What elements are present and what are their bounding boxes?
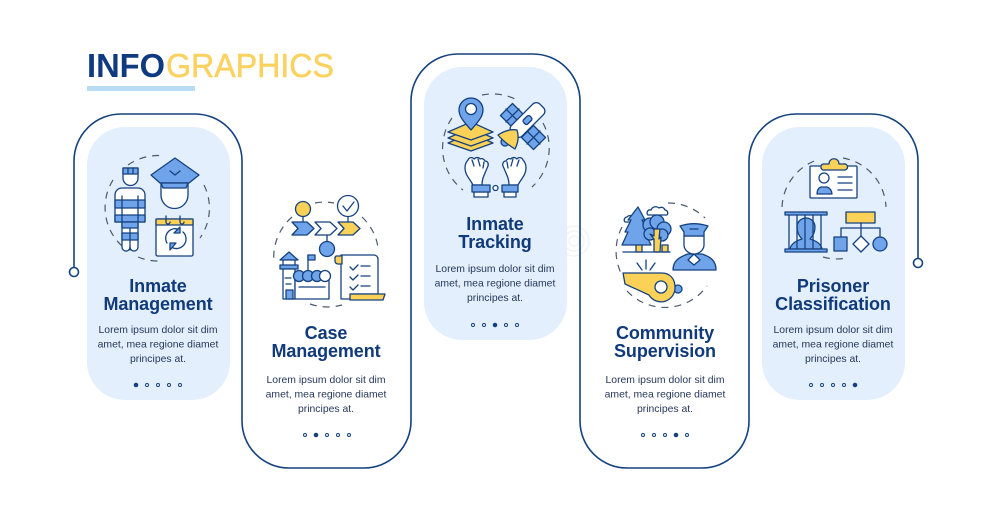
page dots	[134, 383, 182, 387]
heading: Inmate	[129, 276, 187, 296]
heading: Management	[271, 341, 381, 361]
icon: workflow, prison and checklist	[274, 196, 385, 307]
heading: Management	[103, 294, 213, 314]
heading: Supervision	[614, 341, 716, 361]
text block: amet, mea regione diamet	[266, 390, 386, 400]
heading: Case	[305, 323, 347, 343]
text block: principes at.	[298, 404, 354, 415]
text block: amet, mea regione diamet	[773, 340, 893, 350]
text block: Lorem ipsum dolor sit dim	[436, 264, 554, 275]
text block: Lorem ipsum dolor sit dim	[774, 325, 892, 336]
text block: principes at.	[637, 404, 693, 415]
text block: amet, mea regione diamet	[605, 390, 725, 400]
panel: inmate management	[87, 127, 230, 400]
connecting outline	[70, 54, 922, 468]
panel: prisoner classification	[762, 127, 905, 400]
text block: amet, mea regione diamet	[98, 340, 218, 350]
text block: Lorem ipsum dolor sit dim	[267, 375, 385, 386]
icon: location, satellite and handcuffs	[443, 94, 549, 197]
icon: id card, jailed person and org chart	[782, 158, 887, 259]
text block: Lorem ipsum dolor sit dim	[99, 325, 217, 336]
panel: case management	[266, 196, 386, 437]
panel: community supervision	[605, 203, 725, 437]
heading: Tracking	[458, 232, 532, 252]
heading: Prisoner	[797, 276, 869, 296]
text block: Lorem ipsum dolor sit dim	[606, 375, 724, 386]
heading: Community	[616, 323, 714, 343]
panel: inmate tracking	[424, 67, 567, 340]
title	[87, 48, 334, 91]
text block: amet, mea regione diamet	[435, 278, 555, 290]
page dots	[642, 433, 688, 437]
heading: Classification	[775, 294, 891, 314]
icon: prisoner, officer and calendar	[105, 156, 209, 261]
text block: principes at.	[130, 354, 186, 365]
title: INFO	[87, 48, 165, 85]
page dots	[304, 433, 350, 437]
page dots	[472, 323, 518, 327]
page dots	[810, 383, 857, 387]
text block: principes at.	[467, 293, 523, 304]
title: GRAPHICS	[166, 48, 334, 85]
heading: Inmate	[466, 214, 524, 234]
text block: principes at.	[805, 354, 861, 365]
icon: trees, officer and whistle	[616, 203, 716, 307]
